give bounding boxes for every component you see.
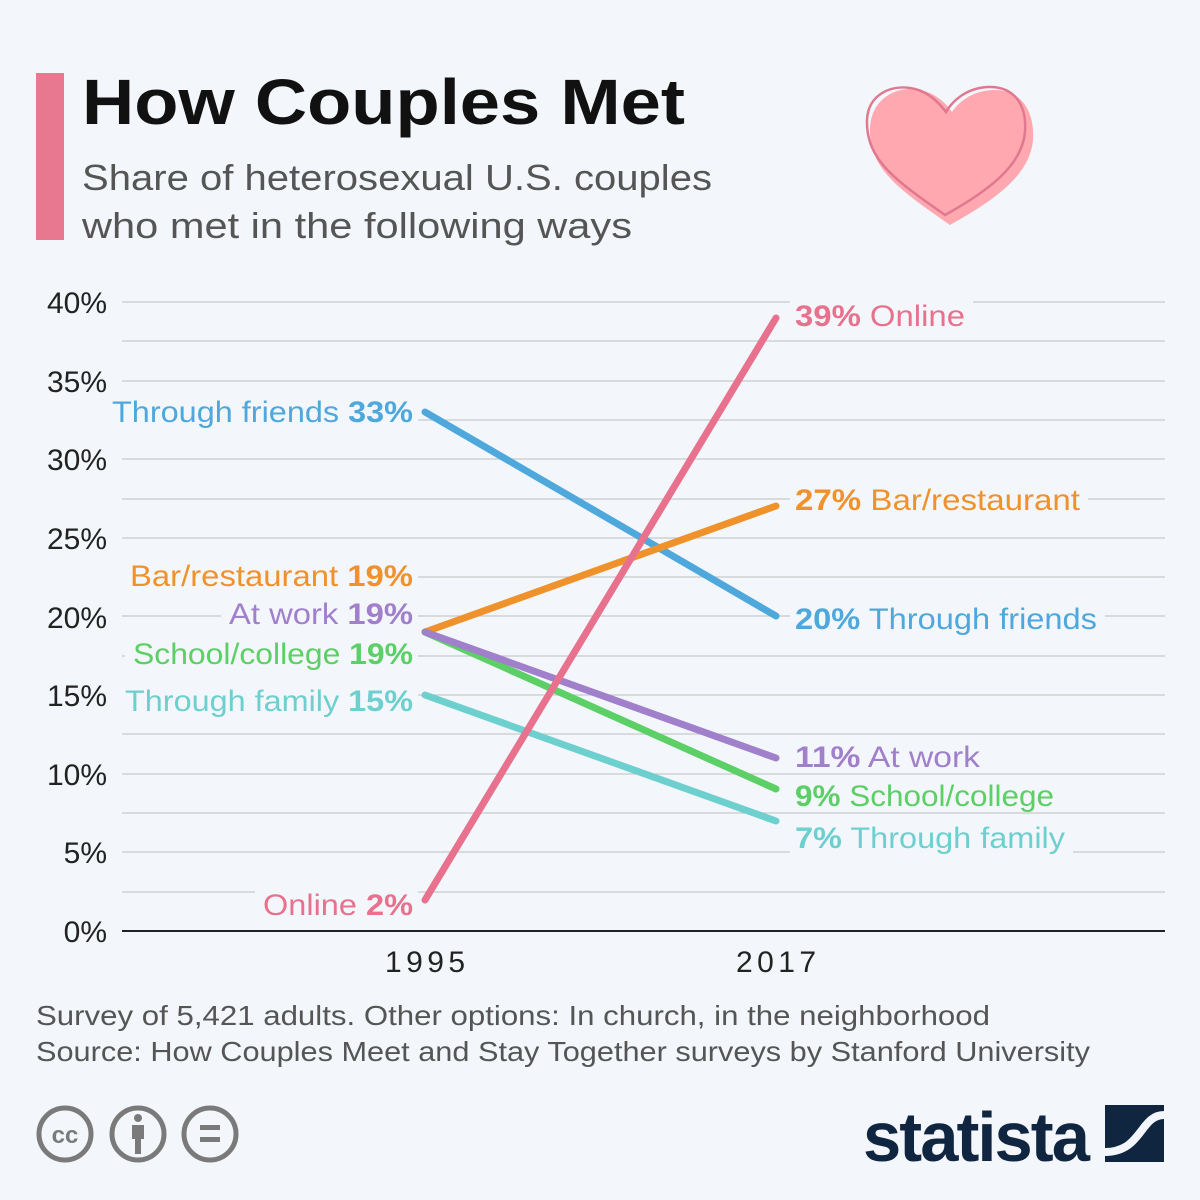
logo: statista: statista xyxy=(863,1098,1091,1176)
footnote: Source: How Couples Meet and Stay Together surveys by Stanford University xyxy=(36,1036,1090,1067)
y axis labels: 20% xyxy=(47,602,107,635)
footnote xyxy=(36,1000,1090,1067)
y axis labels: 15% xyxy=(47,680,107,713)
left labels: School/college 19% xyxy=(133,638,413,671)
right labels: 9% School/college xyxy=(795,780,1054,813)
y axis labels: 30% xyxy=(47,444,107,477)
y axis labels xyxy=(47,287,107,949)
y axis labels: 10% xyxy=(47,759,107,792)
x axis labels: 2017 xyxy=(736,946,816,979)
icon: cc license: cc xyxy=(52,1122,78,1149)
left labels: Through family 15% xyxy=(125,685,413,718)
y axis labels: 0% xyxy=(64,916,107,949)
subtitle xyxy=(81,157,712,246)
title accent bar xyxy=(36,73,64,240)
x axis labels xyxy=(385,946,816,979)
title: How Couples Met xyxy=(82,66,685,138)
lines chart xyxy=(425,318,776,900)
right labels: 20% Through friends xyxy=(795,603,1097,636)
right labels: 27% Bar/restaurant xyxy=(795,484,1081,517)
icon: heart xyxy=(867,87,1033,225)
left labels: Online 2% xyxy=(263,889,413,922)
left labels: Bar/restaurant 19% xyxy=(130,560,413,593)
y axis labels: 5% xyxy=(64,837,107,870)
right labels xyxy=(795,300,1097,855)
subtitle: Share of heterosexual U.S. couples xyxy=(82,157,712,198)
label backgrounds xyxy=(104,296,1105,920)
grid lines xyxy=(122,302,1165,892)
left labels: Through friends 33% xyxy=(112,396,413,429)
right labels: 7% Through family xyxy=(795,822,1065,855)
left labels xyxy=(112,396,413,922)
y axis labels: 25% xyxy=(47,523,107,556)
subtitle: who met in the following ways xyxy=(81,205,632,246)
right labels: 11% At work xyxy=(795,741,981,774)
y axis labels: 35% xyxy=(47,366,107,399)
y axis labels: 40% xyxy=(47,287,107,320)
left labels: At work 19% xyxy=(229,598,413,631)
right labels: 39% Online xyxy=(795,300,965,333)
icon: cc license xyxy=(39,1108,236,1160)
x axis labels: 1995 xyxy=(385,946,465,979)
footnote: Survey of 5,421 adults. Other options: In church, in the neighborhood xyxy=(36,1000,990,1031)
